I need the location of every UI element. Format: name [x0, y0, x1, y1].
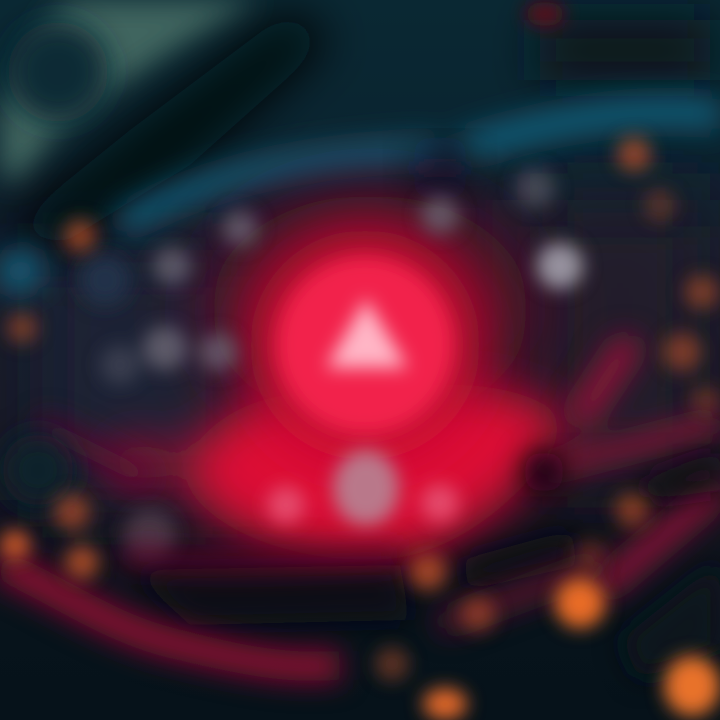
- red base region: [108, 385, 570, 560]
- central glowing disc: [250, 230, 480, 460]
- side haze panels: [30, 200, 710, 500]
- dark sphere top-left: [8, 22, 108, 122]
- dark holes: [2, 434, 720, 680]
- disc core: [277, 257, 453, 433]
- top-left pale teal patches: [0, 0, 260, 185]
- disc halo: [250, 230, 480, 460]
- red lower streak: [0, 555, 600, 666]
- dark diagonal beneath the patches: [0, 10, 710, 245]
- icon: white triangle: [326, 298, 408, 368]
- grey network nodes: [79, 168, 583, 561]
- dark node above the haze: [414, 150, 466, 186]
- grey circles under the disc: [267, 450, 459, 526]
- red spot at top: [525, 2, 565, 26]
- dark red haze around center: [210, 195, 530, 425]
- magenta streaks right: [40, 350, 720, 590]
- teal curved band: [0, 112, 720, 280]
